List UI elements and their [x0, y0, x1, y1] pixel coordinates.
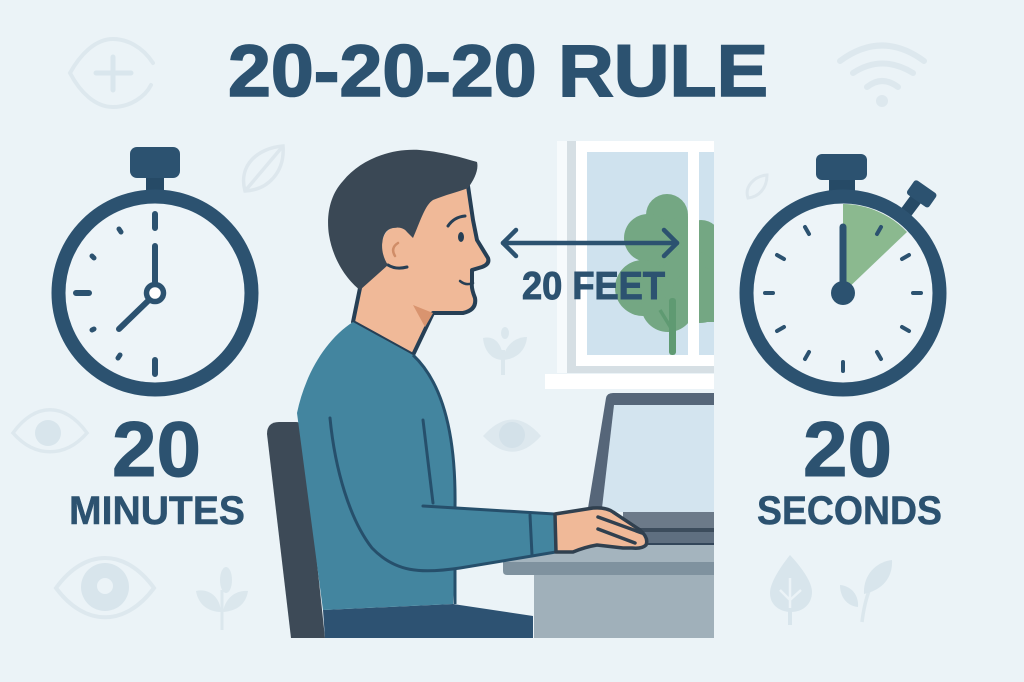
window — [545, 141, 728, 389]
left stopwatch — [58, 147, 252, 390]
green elapsed wedge — [843, 204, 907, 293]
left number: 20 — [112, 405, 201, 493]
right stopwatch — [746, 154, 940, 390]
person — [297, 150, 647, 638]
eye — [458, 232, 464, 242]
arrow: 20 feet sight line — [503, 230, 677, 256]
icon: eye with plus — [70, 39, 153, 107]
desk — [503, 545, 714, 638]
torso and arm — [297, 322, 556, 610]
neck and face — [353, 186, 488, 355]
ear — [382, 228, 412, 268]
icon: right leaf — [770, 555, 812, 625]
neck shadow — [413, 305, 433, 327]
left label: MINUTES — [69, 489, 245, 533]
right label: SECONDS — [757, 489, 942, 533]
icon: lower eye — [56, 558, 154, 617]
trousers — [323, 604, 533, 638]
title: 20-20-20 RULE — [228, 31, 768, 112]
icon: centre eye — [483, 420, 541, 452]
icon: right sprout — [840, 560, 892, 622]
icon: lower left plant — [196, 567, 248, 630]
icon: wifi — [840, 46, 924, 107]
icon: left eye — [13, 410, 87, 452]
chair — [267, 422, 325, 638]
laptop — [588, 393, 714, 545]
distance label: 20 FEET — [522, 265, 665, 308]
hair — [328, 150, 477, 290]
icon: outlined leaf — [244, 146, 283, 191]
right number: 20 — [803, 405, 892, 493]
hand — [555, 508, 647, 552]
tree — [615, 194, 714, 355]
eyebrow — [448, 216, 465, 226]
icon: small leaf — [747, 175, 767, 198]
icon: centre sprout — [483, 327, 527, 375]
smile — [460, 281, 473, 284]
